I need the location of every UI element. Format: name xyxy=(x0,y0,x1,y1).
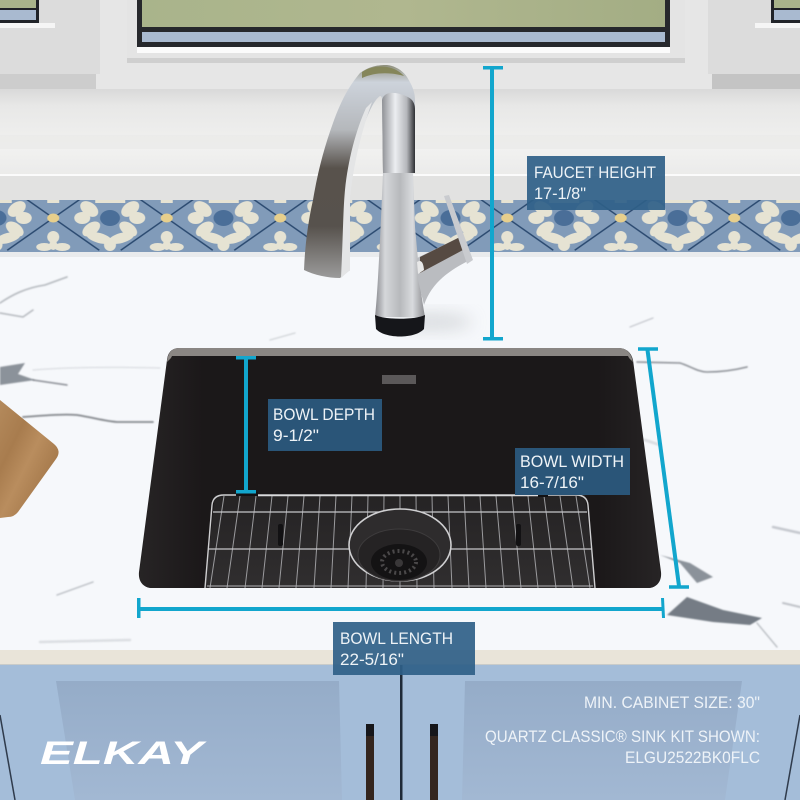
marble dark clumps xyxy=(0,363,762,625)
faucet handle xyxy=(417,236,470,305)
window sill xyxy=(0,89,800,200)
decorative tile backsplash xyxy=(0,200,800,252)
bowl width label: 16-7/16" xyxy=(520,473,584,492)
sink xyxy=(139,348,661,588)
sink kit note: QUARTZ CLASSIC® SINK KIT SHOWN: xyxy=(485,728,760,746)
wire grid xyxy=(205,495,595,588)
bowl depth dimension line xyxy=(236,356,256,494)
left window panel xyxy=(0,0,100,89)
window wall background xyxy=(0,0,800,92)
drain strainer xyxy=(349,509,451,581)
marble countertop xyxy=(0,252,800,650)
faucet height dimension line xyxy=(483,66,503,340)
faucet body xyxy=(375,173,425,317)
faucet height label: FAUCET HEIGHT xyxy=(534,163,656,182)
sink floor xyxy=(205,495,595,588)
sink kit note xyxy=(485,728,760,767)
faucet spout xyxy=(304,65,415,278)
right window panel xyxy=(708,0,800,89)
right door handle xyxy=(430,724,438,800)
faucet height label: 17-1/8" xyxy=(534,184,586,203)
Elkay logo: ELKAY xyxy=(40,735,207,771)
bowl depth label: 9-1/2" xyxy=(273,426,319,445)
counter front edge xyxy=(0,650,800,666)
bowl length dimension line xyxy=(137,598,665,618)
bowl length label: BOWL LENGTH xyxy=(340,629,453,648)
bowl depth label xyxy=(268,399,382,451)
blue cabinet xyxy=(0,665,800,800)
center window xyxy=(127,0,685,63)
bowl width dimension line xyxy=(638,349,689,587)
bowl depth label: BOWL DEPTH xyxy=(273,405,375,424)
sink rim xyxy=(167,348,633,362)
bowl length label: 22-5/16" xyxy=(340,650,404,669)
sink kit note: ELGU2522BK0FLC xyxy=(625,749,760,767)
faucet height label xyxy=(527,156,665,210)
faucet xyxy=(304,65,473,336)
faucet base xyxy=(375,315,425,336)
bowl width label: BOWL WIDTH xyxy=(520,452,624,471)
bowl width label xyxy=(515,448,630,495)
cutting board xyxy=(0,400,59,518)
minimum cabinet size note: MIN. CABINET SIZE: 30" xyxy=(584,694,760,712)
grid clips xyxy=(236,492,548,546)
left door handle xyxy=(366,724,374,800)
overflow plate xyxy=(382,375,416,384)
bowl length label xyxy=(333,622,475,675)
